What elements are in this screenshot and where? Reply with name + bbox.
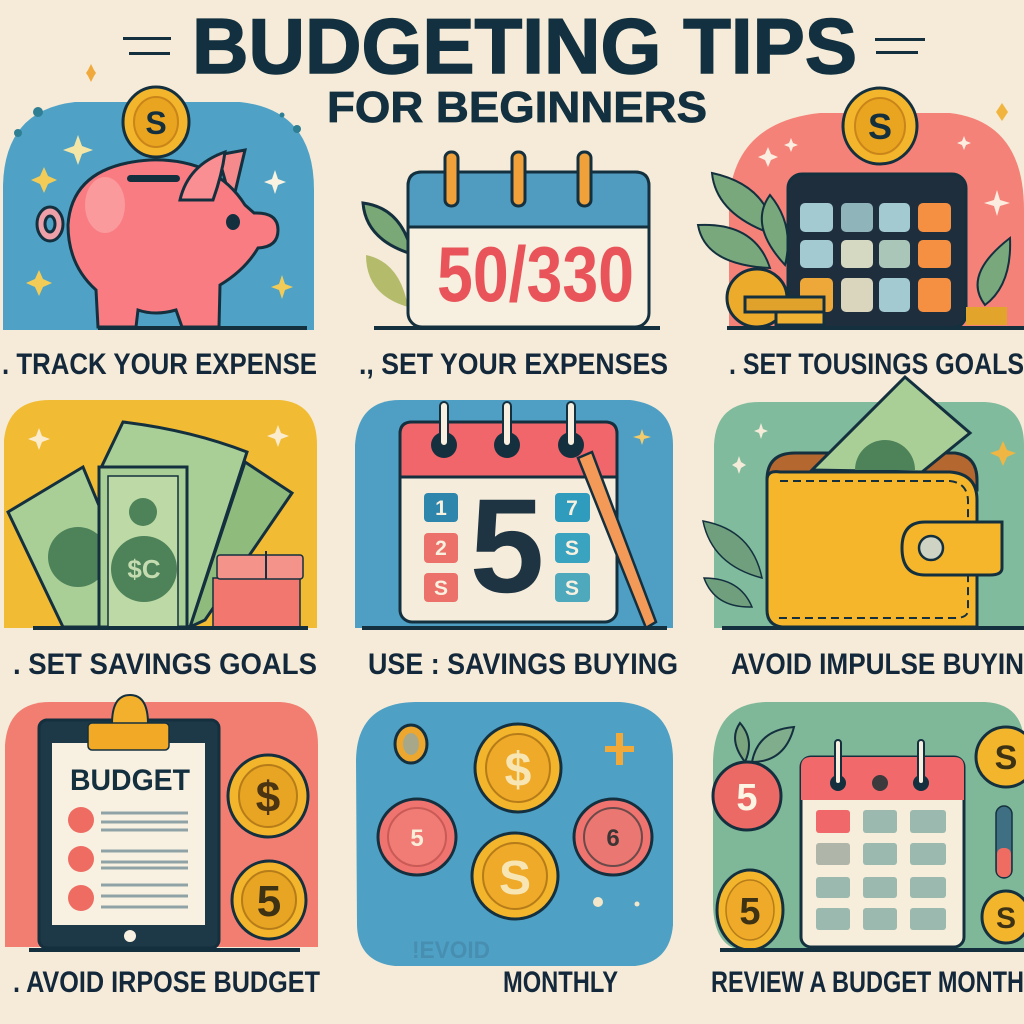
icon: gold coin bottom right: S <box>996 902 1016 935</box>
icon: red coin six <box>574 799 652 875</box>
icon: coin above calculator <box>843 88 917 164</box>
icon: large gold coin bottom: S <box>499 852 531 905</box>
icon: wallet <box>767 472 1002 627</box>
panel: track your expense <box>3 64 314 330</box>
label: monthly: MONTHLY <box>503 966 618 999</box>
icon: banknote in wallet <box>812 377 970 472</box>
label: use savings buying: USE : SAVINGS BUYING <box>368 648 678 681</box>
label: set savings goals: . SET SAVINGS GOALS <box>13 648 317 681</box>
icon: leaves <box>703 521 762 607</box>
icon: gold coin left <box>717 870 783 950</box>
icon: red coin five: 5 <box>410 825 424 852</box>
icon: sparkles and dots <box>14 64 301 299</box>
icon: sparkles <box>758 136 1010 216</box>
icon: calendar: S <box>434 577 448 600</box>
icon: coins with dollar and five <box>228 755 308 939</box>
icon: sparkles <box>28 425 289 450</box>
icon: sparkle <box>633 429 651 445</box>
icon: calculator <box>788 174 966 328</box>
icon: banknotes <box>8 422 292 627</box>
icon: large gold coin bottom <box>472 833 558 919</box>
panel: budget clipboard <box>5 695 318 952</box>
icon: coins with dollar and five: $ <box>256 773 280 822</box>
icon: gold coin above piggy bank <box>123 87 189 157</box>
icon: apple with five: 5 <box>736 777 758 819</box>
icon: pencil <box>578 452 656 628</box>
title: BUDGETING TIPS <box>192 2 857 90</box>
label: track your expense: . TRACK YOUR EXPENSE <box>2 348 317 381</box>
icon: gold coin left: 5 <box>739 891 761 933</box>
icon: leaves <box>363 203 412 307</box>
icon: calendar: 50/330 <box>437 230 634 318</box>
icon: red coin five <box>378 799 456 875</box>
icon: small ring coin <box>395 725 427 763</box>
icon: calendar: 7 <box>566 497 578 520</box>
icon: clipboard: BUDGET <box>70 764 190 797</box>
text: faded avoid: !EVOID <box>412 937 490 964</box>
panel: 50/30 calendar <box>363 152 660 330</box>
icon: gold coin top right: S <box>995 739 1017 777</box>
icon: calendar <box>408 152 649 327</box>
icon: small dots <box>593 897 640 907</box>
icon: calendar: 1 <box>435 497 447 520</box>
icon: gold coin above piggy bank: S <box>145 105 167 141</box>
icon: calendar grid <box>801 740 964 947</box>
subtitle: FOR BEGINNERS <box>327 83 707 132</box>
icon: apple with five <box>713 723 794 830</box>
icon: sparkles <box>732 423 1016 474</box>
icon: leaves <box>698 173 1010 305</box>
label: avoid irpose budget: . AVOID IRPOSE BUDGET <box>13 966 320 999</box>
icon: clipboard <box>39 695 219 948</box>
label: set your expenses: ., SET YOUR EXPENSES <box>359 348 668 381</box>
icon: plus sparkle <box>605 733 634 765</box>
icon: gift box <box>213 551 303 627</box>
icon: large gold coin top <box>475 724 561 812</box>
icon: calendar: 5 <box>470 472 544 621</box>
icon: coin above calculator: S <box>868 106 892 147</box>
icon: coin stack <box>727 269 1007 327</box>
icon: large gold coin top: $ <box>505 744 532 797</box>
panel: wallet <box>703 377 1024 630</box>
panel: calculator <box>698 88 1024 330</box>
icon: thermometer <box>996 806 1012 878</box>
icon: wallet back <box>767 453 977 490</box>
icon: calendar: S <box>565 577 579 600</box>
icon: calendar: 2 <box>435 537 447 560</box>
panel: coins <box>356 702 673 966</box>
panel: numbered calendar <box>355 400 673 630</box>
panel: cash: $C <box>127 554 161 584</box>
panel: monthly calendar <box>713 702 1024 952</box>
icon: red coin six: 6 <box>606 825 620 852</box>
icon: coins with dollar and five: 5 <box>257 877 281 926</box>
icon: piggy bank <box>37 150 278 327</box>
icon: gold coin top right <box>976 727 1024 787</box>
icon: calendar: S <box>565 537 579 560</box>
icon: gold coin bottom right <box>982 891 1024 943</box>
panel: cash <box>4 400 317 630</box>
icon: calendar <box>400 402 617 622</box>
